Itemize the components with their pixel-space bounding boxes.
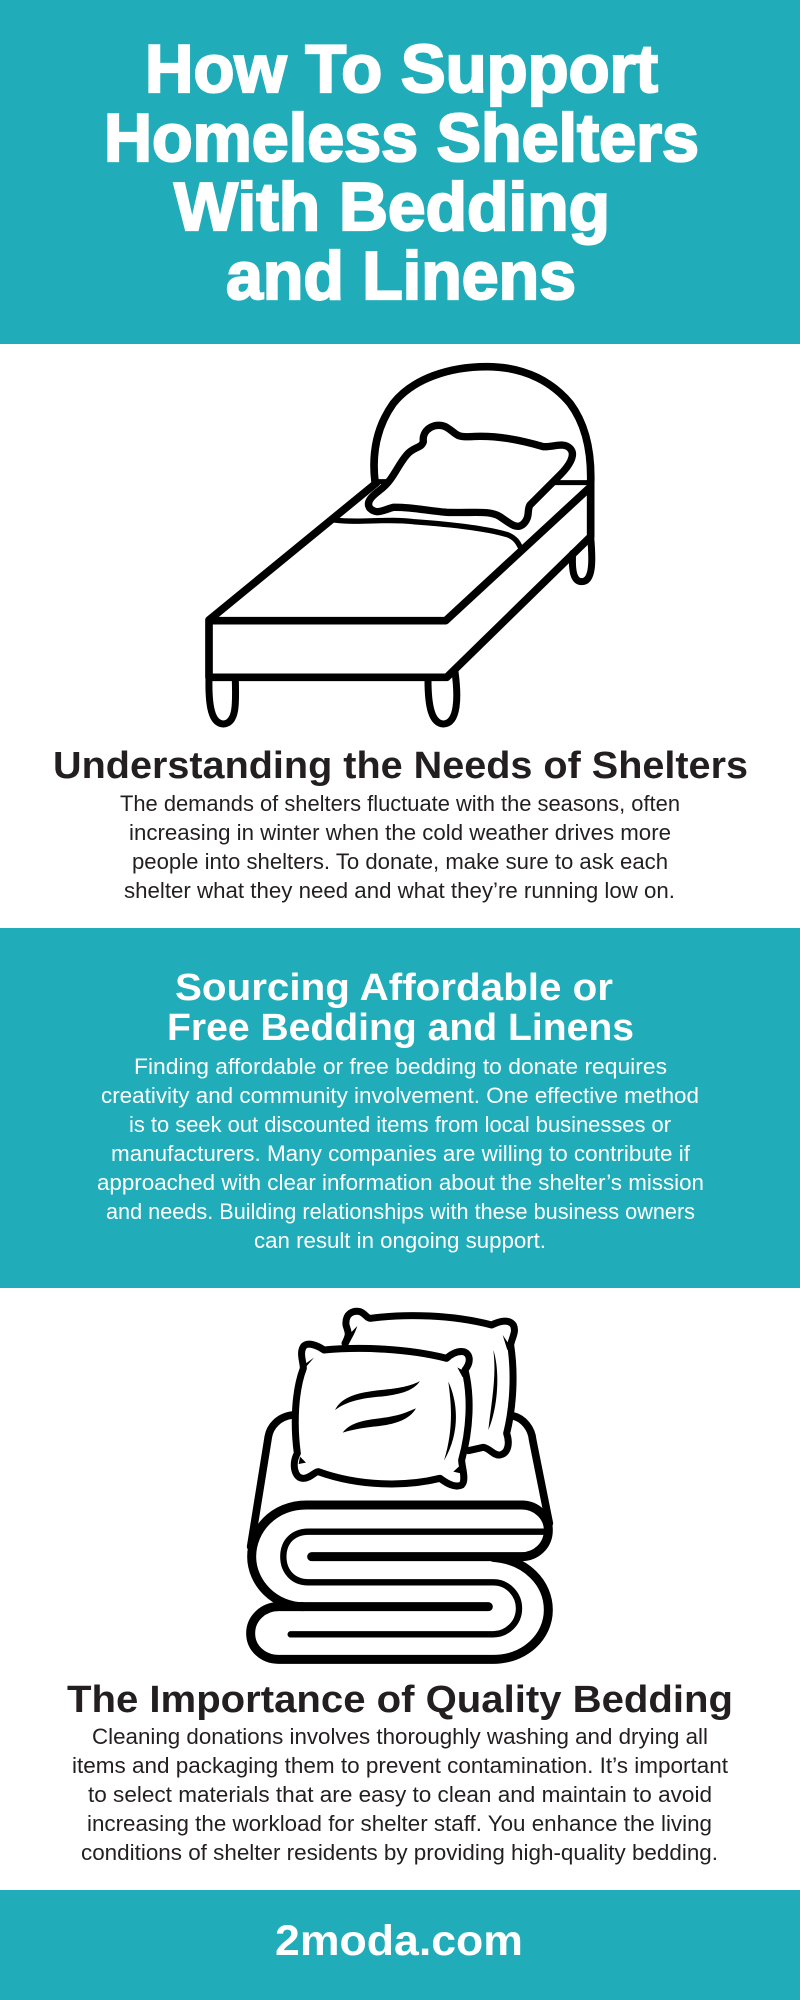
icon: pillows on folded blanket [251,1311,549,1659]
text block: understanding the needs of shelters: increasing in winter when the cold weather drives more [129,820,671,845]
heading: sourcing affordable or free bedding and linens: Free Bedding and Linens [167,1007,634,1049]
panel: title header [0,0,800,344]
text block: sourcing affordable or free bedding and linens: approached with clear information about the shelter’s mission [97,1170,704,1195]
text block: sourcing affordable or free bedding and linens: is to seek out discounted items from local businesses or [129,1112,671,1137]
text block: understanding the needs of shelters: people into shelters. To donate, make sure to ask each [132,849,668,874]
website address: 2moda.com [275,1917,523,1965]
heading: the importance of quality bedding: The Importance of Quality Bedding [67,1679,733,1721]
text block: sourcing affordable or free bedding and linens: Finding affordable or free bedding to donate requires [134,1054,667,1079]
panel: footer [0,1890,800,2000]
text block: understanding the needs of shelters: The demands of shelters fluctuate with the seasons, often [120,791,680,816]
panel: the importance of quality bedding [67,1311,733,1865]
text block: the importance of quality bedding: conditions of shelter residents by providing high-quality bedding. [81,1840,718,1865]
title: and Linens [226,238,576,314]
heading: sourcing affordable or free bedding and linens: Sourcing Affordable or [175,967,613,1009]
text block: the importance of quality bedding: increasing the workload for shelter staff. You enhance the living [87,1811,712,1836]
icon: bed with pillow [209,367,592,724]
text block: sourcing affordable or free bedding and linens: manufacturers. Many companies are willing to contribute if [111,1141,691,1166]
text block: understanding the needs of shelters [120,791,680,903]
heading: sourcing affordable or free bedding and linens [167,967,634,1049]
text block: the importance of quality bedding: items and packaging them to prevent contamination. It’s important [72,1753,728,1778]
text block: the importance of quality bedding: Cleaning donations involves thoroughly washing and drying all [92,1724,708,1749]
title: How To Support [145,31,658,107]
panel: sourcing affordable or free bedding and linens [0,928,800,1288]
text block: sourcing affordable or free bedding and linens: and needs. Building relationships with these business owners [106,1199,695,1224]
title [104,31,699,314]
text block: sourcing affordable or free bedding and linens [97,1054,704,1253]
text block: sourcing affordable or free bedding and linens: creativity and community involvement. One effective method [101,1083,699,1108]
title: Homeless Shelters [104,100,699,176]
text block: understanding the needs of shelters: shelter what they need and what they’re running low on. [124,878,675,903]
heading: understanding the needs of shelters: Understanding the Needs of Shelters [53,745,748,787]
text block: the importance of quality bedding [72,1724,728,1865]
panel: understanding the needs of shelters [53,367,748,903]
text block: the importance of quality bedding: to select materials that are easy to clean and maintain to avoid [88,1782,712,1807]
title: With Bedding [174,169,610,245]
text block: sourcing affordable or free bedding and linens: can result in ongoing support. [254,1228,546,1253]
